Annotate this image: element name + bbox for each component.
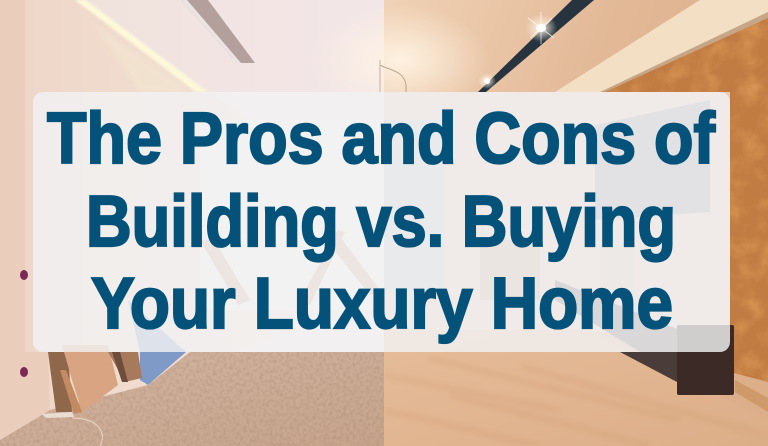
photo: unfinished room on the left: [0, 0, 385, 446]
photo: finished room on the right: [310, 0, 768, 446]
title line 2: Building vs. Buying: [86, 182, 676, 262]
translucent title panel: [33, 92, 730, 352]
title line 3: Your Luxury Home: [91, 264, 673, 344]
title: [47, 99, 716, 344]
